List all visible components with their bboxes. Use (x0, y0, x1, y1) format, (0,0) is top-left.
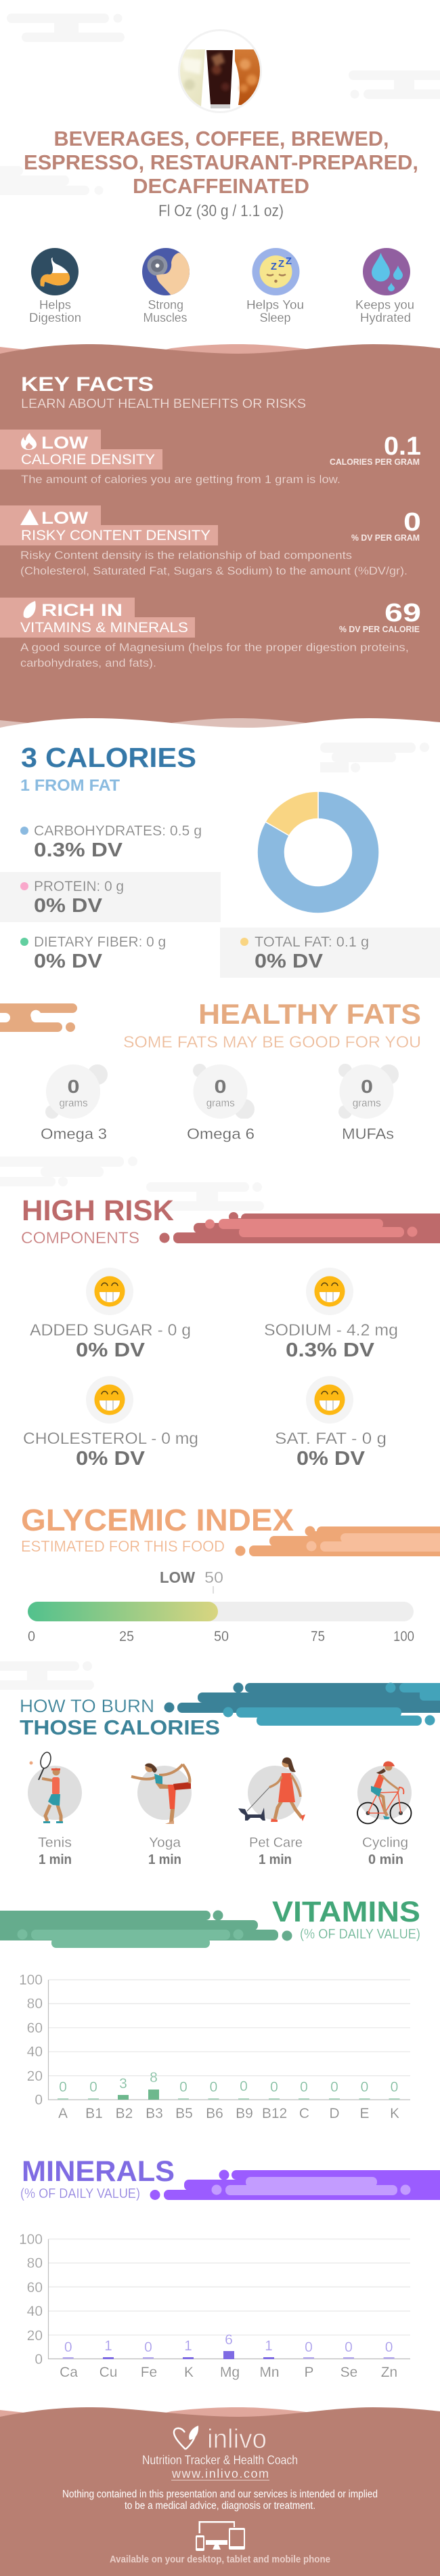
bar chart: minerals: 0 (64, 2340, 72, 2355)
title: BEVERAGES, COFFEE, BREWED, (54, 127, 389, 150)
website link: www.inlivo.com (171, 2467, 269, 2480)
fact: low risky content density: 0 (403, 508, 421, 537)
fact: low calorie density (0, 430, 421, 486)
risk: added sugar: 0% DV (76, 1339, 146, 1361)
benefit: helps you sleep: Sleep (260, 311, 291, 325)
icon: sleeping face: Z (278, 258, 284, 270)
availability note: Available on your desktop, tablet and mobile phone (110, 2554, 330, 2565)
activity: pet care: Pet Care (249, 1835, 303, 1850)
subheading: from fat: 1 FROM FAT (20, 776, 120, 795)
icon: devices (196, 2521, 245, 2551)
bar chart: minerals: 40 (27, 2304, 43, 2319)
fat: omega 3: 0 (68, 1076, 80, 1097)
bar chart: minerals: Mn (259, 2365, 280, 2380)
heading: healthy fats: HEALTHY FATS (198, 998, 421, 1030)
fact: low calorie density: CALORIE DENSITY (21, 451, 155, 468)
bar chart: minerals: Se (340, 2365, 357, 2380)
fact: rich in vitamins and minerals (0, 598, 421, 669)
activity: pet care (238, 1758, 305, 1867)
bar chart: minerals: 0 (35, 2352, 43, 2367)
glycemic gauge (28, 1569, 414, 1644)
fat: omega 3 (41, 1064, 108, 1142)
decoration: high risk bars (160, 1212, 440, 1243)
background cloud: top left (7, 14, 125, 42)
disclaimer: to be a medical advice, diagnosis or treatment. (125, 2500, 315, 2512)
bar chart: vitamins: 8 (150, 2070, 158, 2085)
bar chart: minerals: 1 (184, 2338, 192, 2354)
legend: total fat (220, 928, 440, 978)
bar chart: vitamins: D (329, 2106, 340, 2121)
fat: mufas: 0 (361, 1076, 373, 1097)
bar chart: vitamins: B1 (85, 2106, 103, 2121)
risk: sodium: SODIUM - 4.2 mg (264, 1321, 398, 1339)
background cloud: calories (320, 743, 429, 772)
benefit: keeps you hydrated (355, 248, 414, 325)
fact: low calorie density: The amount of calories you are getting from 1 gram is low. (21, 473, 340, 486)
activity: tennis: 1 min (39, 1852, 72, 1867)
bar chart: vitamins: 0 (270, 2079, 278, 2095)
bar chart: minerals: Ca (60, 2365, 78, 2380)
activity: cycling: Cycling (362, 1835, 408, 1850)
bar chart: vitamins: 0 (391, 2079, 398, 2095)
bar chart: minerals: 100 (19, 2232, 43, 2247)
fact: low risky content density: LOW (41, 509, 88, 528)
background cloud: beside title (0, 166, 103, 195)
bar chart: vitamins: B12 (262, 2106, 287, 2121)
risk: saturated fat (275, 1376, 387, 1470)
title: ESPRESSO, RESTAURANT-PREPARED, (24, 150, 418, 174)
glycemic gauge: LOW (160, 1569, 195, 1586)
heading: calories: 3 CALORIES (21, 742, 196, 773)
legend: protein: PROTEIN: 0 g (34, 879, 124, 894)
bar chart: vitamins: K (390, 2106, 399, 2121)
logo: inlivo: inlivo (207, 2424, 267, 2454)
hero image: iced coffee glasses (177, 30, 263, 112)
decoration: glycemic bars (236, 1526, 440, 1556)
bar chart: minerals: P (304, 2365, 314, 2380)
heading: minerals: MINERALS (22, 2155, 175, 2188)
glycemic gauge: 50 (204, 1569, 223, 1586)
decoration: vitamins bars (0, 1911, 292, 1948)
activity: cycling: 0 min (368, 1852, 403, 1867)
fat: mufas: grams (353, 1098, 381, 1109)
bar chart: vitamins (19, 1972, 410, 2121)
fat: omega 6: Omega 6 (187, 1125, 255, 1142)
heading: how to burn: HOW TO BURN (20, 1696, 154, 1716)
subheading: vitamins daily value: (% OF DAILY VALUE) (300, 1927, 420, 1942)
bar chart: minerals: Fe (141, 2365, 157, 2380)
benefit: helps you sleep (246, 248, 304, 325)
icon: yoga pose (131, 1763, 191, 1824)
logo: inlivo (174, 2424, 267, 2454)
bar chart: minerals: 0 (305, 2340, 313, 2355)
bar chart: minerals: 0 (385, 2340, 393, 2355)
legend: protein (0, 872, 221, 922)
title: DECAFFEINATED (133, 174, 309, 198)
activity: tennis: Tenis (38, 1835, 72, 1850)
icon: water drops (363, 248, 410, 295)
risk: sodium: 0.3% DV (286, 1339, 375, 1361)
subheading: LEARN ABOUT HEALTH BENEFITS OR RISKS (21, 397, 306, 411)
legend: protein: 0% DV (34, 895, 103, 917)
fact: rich in vitamins and minerals: 69 (384, 599, 421, 627)
fact: rich in vitamins and minerals: A good source of Magnesium (helps for the proper digestion proteins, (20, 641, 409, 654)
benefit: keeps you hydrated: Hydrated (360, 311, 411, 325)
subheading: minerals daily value: (% OF DAILY VALUE) (20, 2186, 140, 2201)
icon: cyclist (357, 1762, 412, 1824)
benefit: strong muscles (142, 248, 190, 325)
risk: added sugar: ADDED SUGAR - 0 g (30, 1321, 191, 1339)
benefit: helps you sleep: Helps You (246, 298, 304, 312)
icon: sleeping face (252, 248, 299, 295)
bar chart: vitamins: 100 (19, 1972, 43, 1988)
legend: carbohydrates (20, 823, 202, 861)
activity: yoga: Yoga (149, 1835, 181, 1850)
bar chart: minerals: 20 (27, 2328, 43, 2344)
fat: omega 6 (187, 1064, 255, 1142)
bar chart: vitamins: 0 (330, 2079, 338, 2095)
background cloud: left of high risk (0, 1157, 137, 1186)
legend: carbohydrates: CARBOHYDRATES: 0.5 g (34, 823, 202, 839)
risk: saturated fat: SAT. FAT - 0 g (275, 1430, 387, 1448)
fact: low calorie density: 0.1 (384, 432, 421, 461)
bar chart: minerals (19, 2232, 410, 2380)
fact: rich in vitamins and minerals: carbohydrates, and fats). (20, 657, 156, 669)
risk: cholesterol: CHOLESTEROL - 0 mg (23, 1430, 198, 1448)
fat: omega 6: 0 (214, 1076, 226, 1097)
icon: arm with weight plate (142, 248, 190, 296)
risk: cholesterol (23, 1376, 198, 1470)
activity: tennis (28, 1751, 82, 1867)
bar chart: vitamins: 0 (210, 2079, 217, 2095)
decoration: minerals bars (150, 2169, 440, 2200)
activity: cycling (357, 1762, 412, 1867)
fact: low calorie density: LOW (41, 434, 88, 453)
fact: rich in vitamins and minerals: VITAMINS & MINERALS (20, 619, 188, 636)
legend: total fat: TOTAL FAT: 0.1 g (255, 934, 369, 950)
bar chart: minerals: 60 (27, 2280, 43, 2295)
title (24, 127, 418, 198)
bar chart: vitamins: B2 (116, 2106, 133, 2121)
legend: carbohydrates: 0.3% DV (34, 839, 123, 861)
decoration: healthy fats bars (0, 1003, 77, 1032)
legend: dietary fiber: 0% DV (34, 951, 103, 972)
subheading: components: COMPONENTS (21, 1229, 139, 1247)
benefit: helps digestion: Helps (39, 298, 71, 312)
fact: rich in vitamins and minerals: RICH IN (41, 601, 123, 620)
fact: rich in vitamins and minerals: % DV PER CALORIE (339, 624, 420, 634)
tagline: Nutrition Tracker & Health Coach (142, 2453, 298, 2467)
bar chart: minerals: 0 (345, 2340, 353, 2355)
fact: low risky content density: RISKY CONTENT DENSITY (21, 527, 211, 543)
benefit: helps digestion: Digestion (29, 311, 81, 325)
bar chart: vitamins: C (299, 2106, 309, 2121)
activity: yoga: 1 min (148, 1852, 181, 1867)
fat: omega 3: grams (60, 1098, 88, 1109)
icon: sleeping face: Z (271, 261, 277, 272)
heading: glycemic index: GLYCEMIC INDEX (21, 1503, 294, 1537)
icon: woman walking dog (238, 1758, 305, 1822)
heading: key facts: KEY FACTS (21, 373, 154, 396)
fat: mufas: MUFAs (342, 1125, 394, 1142)
bar chart: minerals: 0 (144, 2340, 152, 2355)
subheading: estimated: ESTIMATED FOR THIS FOOD (21, 1537, 225, 1555)
background cloud: right of high risk (146, 1182, 264, 1211)
bar chart: vitamins: E (359, 2106, 370, 2121)
panel: key facts (0, 344, 440, 728)
legend: total fat: 0% DV (255, 951, 324, 972)
bar chart: vitamins: 0 (240, 2079, 248, 2094)
heading: those calories: THOSE CALORIES (20, 1716, 220, 1739)
bar chart: vitamins: 0 (59, 2079, 67, 2095)
fact: low risky content density (0, 505, 421, 577)
fat: omega 6: grams (206, 1098, 235, 1109)
bar chart: minerals: Mg (220, 2365, 240, 2380)
bar chart: minerals: K (184, 2365, 194, 2380)
bar chart: vitamins: B3 (146, 2106, 163, 2121)
bar chart: vitamins: 60 (27, 2020, 43, 2036)
bar chart: vitamins: 0 (300, 2079, 308, 2095)
serving size subtitle: Fl Oz (30 g / 1.1 oz) (158, 202, 284, 220)
fact: low risky content density: % DV PER GRAM (351, 533, 420, 543)
icon: tennis player (30, 1751, 63, 1823)
bar chart: vitamins: 80 (27, 1996, 43, 2012)
heading: high risk: HIGH RISK (22, 1194, 174, 1227)
benefit: strong muscles: Muscles (144, 311, 187, 325)
bar chart: minerals: 1 (104, 2338, 112, 2354)
bar chart: vitamins: 0 (179, 2079, 188, 2095)
glycemic gauge: 0 (28, 1629, 35, 1644)
disclaimer (62, 2489, 378, 2512)
bar chart: minerals: 1 (265, 2338, 273, 2354)
benefit: keeps you hydrated: Keeps you (355, 298, 414, 312)
decoration: burn bars (164, 1683, 440, 1726)
icon: warning triangle (20, 509, 39, 525)
fact: low risky content density: (Cholesterol, Saturated Fat, Sugars & Sodium) to the amount (%DV/gr). (20, 564, 408, 577)
disclaimer: Nothing contained in this presentation and our services is intended or implied (62, 2489, 378, 2500)
icon: stomach (31, 248, 79, 295)
glycemic gauge: 25 (119, 1629, 134, 1644)
bar chart: vitamins: 3 (119, 2076, 127, 2092)
bar chart: vitamins: A (58, 2106, 68, 2121)
bar chart: vitamins: 0 (35, 2092, 43, 2108)
bar chart: minerals: Zn (381, 2365, 397, 2380)
icon: sleeping face: Z (286, 255, 292, 267)
bar chart: vitamins: 0 (89, 2079, 97, 2095)
fact: low risky content density: Risky Content density is the relationship of bad components (20, 549, 352, 562)
fat: omega 3: Omega 3 (41, 1125, 107, 1142)
bar chart: minerals: 80 (27, 2256, 43, 2271)
icon: leaf (24, 601, 36, 618)
bar chart: vitamins: 20 (27, 2069, 43, 2084)
fact: low calorie density: CALORIES PER GRAM (330, 457, 420, 467)
bar chart: minerals: Cu (100, 2365, 117, 2380)
bar chart: vitamins: B6 (206, 2106, 223, 2121)
background cloud: top right (349, 70, 440, 99)
background cloud: above burn (0, 1661, 94, 1690)
bar chart: vitamins: 40 (27, 2044, 43, 2060)
glycemic gauge: 100 (393, 1629, 414, 1644)
risk: cholesterol: 0% DV (76, 1448, 146, 1470)
benefit: helps digestion (29, 248, 81, 325)
fat: mufas (338, 1064, 399, 1142)
risk: saturated fat: 0% DV (296, 1448, 366, 1470)
footer panel (0, 2407, 440, 2576)
activity: pet care: 1 min (259, 1852, 292, 1867)
donut chart: calorie sources (257, 791, 379, 913)
glycemic gauge: 50 (214, 1629, 229, 1644)
glycemic gauge: 75 (311, 1629, 325, 1644)
subheading: healthy fats: SOME FATS MAY BE GOOD FOR YOU (123, 1033, 421, 1052)
heading: vitamins: VITAMINS (272, 1896, 420, 1928)
risk: sodium (264, 1268, 398, 1361)
bar chart: vitamins: B5 (175, 2106, 193, 2121)
bar chart: vitamins: 0 (361, 2079, 368, 2095)
bar chart: minerals: 6 (225, 2332, 233, 2348)
risk: added sugar (30, 1268, 191, 1361)
icon: flame (21, 433, 37, 450)
legend: dietary fiber: DIETARY FIBER: 0 g (34, 934, 166, 950)
bar chart: vitamins: B9 (236, 2106, 253, 2121)
benefit: strong muscles: Strong (148, 298, 183, 312)
legend: dietary fiber (20, 934, 166, 972)
activity: yoga (131, 1763, 192, 1867)
